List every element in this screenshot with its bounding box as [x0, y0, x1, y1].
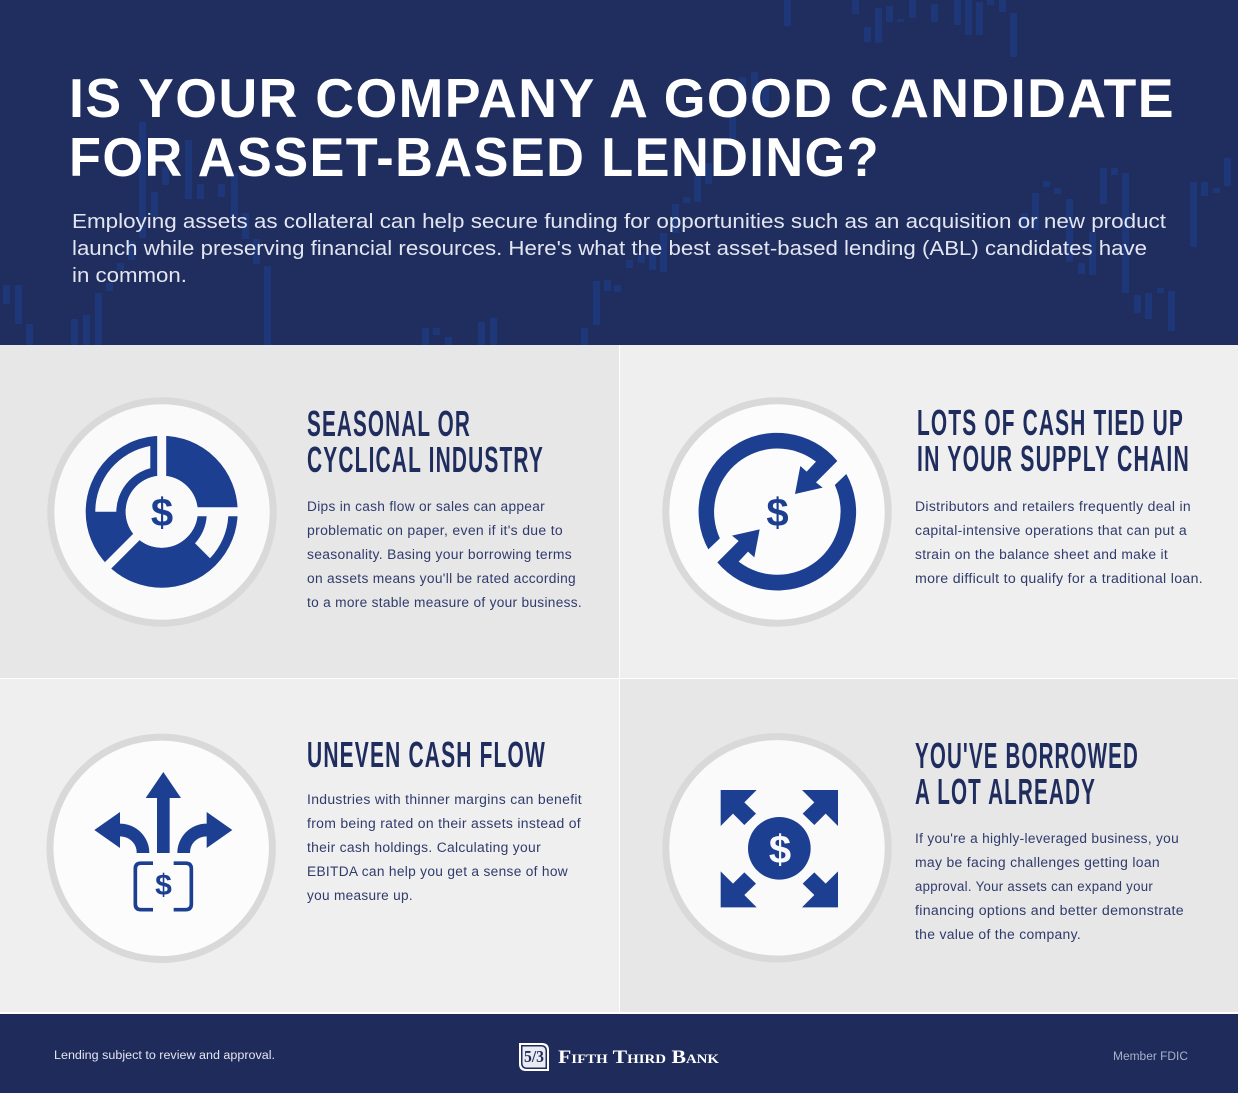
heading	[915, 735, 1139, 812]
body text	[915, 831, 1184, 942]
title: IS YOUR COMPANY A GOOD CANDIDATE	[69, 67, 1175, 129]
logo: Fifth Third Bank: 5/3	[524, 1047, 544, 1066]
title: FOR ASSET-BASED LENDING?	[69, 126, 880, 188]
body text: EBITDA can help you get a sense of how	[307, 864, 568, 879]
icon: expanding arrows around dollar	[666, 737, 888, 959]
panel: uneven cash flow	[0, 679, 619, 1012]
body text: you measure up.	[307, 888, 413, 903]
logo: Fifth Third Bank: Fifth Third Bank	[558, 1047, 720, 1068]
heading	[307, 403, 544, 480]
candlestick chart background	[3, 0, 1231, 345]
body text: to a more stable measure of your business.	[307, 595, 582, 610]
body text	[307, 792, 582, 903]
icon: expanding arrows around dollar: $	[769, 828, 791, 872]
heading: SEASONAL OR	[307, 403, 471, 444]
heading: UNEVEN CASH FLOW	[307, 734, 546, 775]
icon: circular arrows with dollar: $	[766, 491, 789, 535]
body text: financing options and better demonstrate	[915, 903, 1184, 918]
icon: diverging arrows with dollar: $	[155, 869, 172, 902]
logo: Fifth Third Bank	[519, 1043, 720, 1071]
icon: donut chart with dollar	[51, 401, 273, 623]
icon: donut chart with dollar: $	[151, 491, 173, 535]
body text: Distributors and retailers frequently deal in	[915, 499, 1191, 514]
body text: capital-intensive operations that can put a	[915, 523, 1187, 538]
heading: A LOT ALREADY	[915, 771, 1096, 812]
body text: Dips in cash flow or sales can appear	[307, 499, 545, 514]
body text: may be facing challenges getting loan	[915, 855, 1160, 870]
body text: more difficult to qualify for a traditional loan.	[915, 571, 1203, 586]
heading: CYCLICAL INDUSTRY	[307, 439, 544, 480]
body text: problematic on paper, even if it's due to	[307, 523, 563, 538]
heading	[917, 402, 1190, 479]
title	[69, 67, 1175, 188]
disclaimer: Lending subject to review and approval.	[54, 1050, 275, 1062]
icon: diverging arrows with dollar	[50, 737, 272, 960]
member FDIC: Member FDIC	[1113, 1051, 1188, 1063]
panel: seasonal or cyclical industry	[0, 345, 619, 678]
intro text: in common.	[72, 264, 187, 287]
body text: seasonality. Basing your borrowing terms	[307, 547, 572, 562]
body text: strain on the balance sheet and make it	[915, 547, 1168, 562]
body text: their cash holdings. Calculating your	[307, 840, 541, 855]
intro text: Employing assets as collateral can help secure funding for opportunities such as an acquisition or new product	[72, 210, 1166, 233]
body text	[307, 499, 582, 610]
body text: approval. Your assets can expand your	[915, 879, 1153, 894]
body text: If you're a highly-leveraged business, you	[915, 831, 1179, 846]
body text: from being rated on their assets instead of	[307, 816, 581, 831]
body text: the value of the company.	[915, 927, 1081, 942]
panel: borrowed a lot already	[620, 679, 1238, 1012]
icon: circular arrows with dollar	[666, 401, 888, 623]
intro text	[72, 210, 1166, 287]
footer	[0, 1014, 1238, 1093]
panel: cash tied up in supply chain	[620, 345, 1238, 678]
body text	[915, 499, 1203, 586]
body text: Industries with thinner margins can benefit	[307, 792, 582, 807]
header banner	[0, 0, 1238, 345]
intro text: launch while preserving financial resources. Here's what the best asset-based lending (ABL) candidates have	[72, 237, 1147, 260]
body text: on assets means you'll be rated according	[307, 571, 576, 586]
